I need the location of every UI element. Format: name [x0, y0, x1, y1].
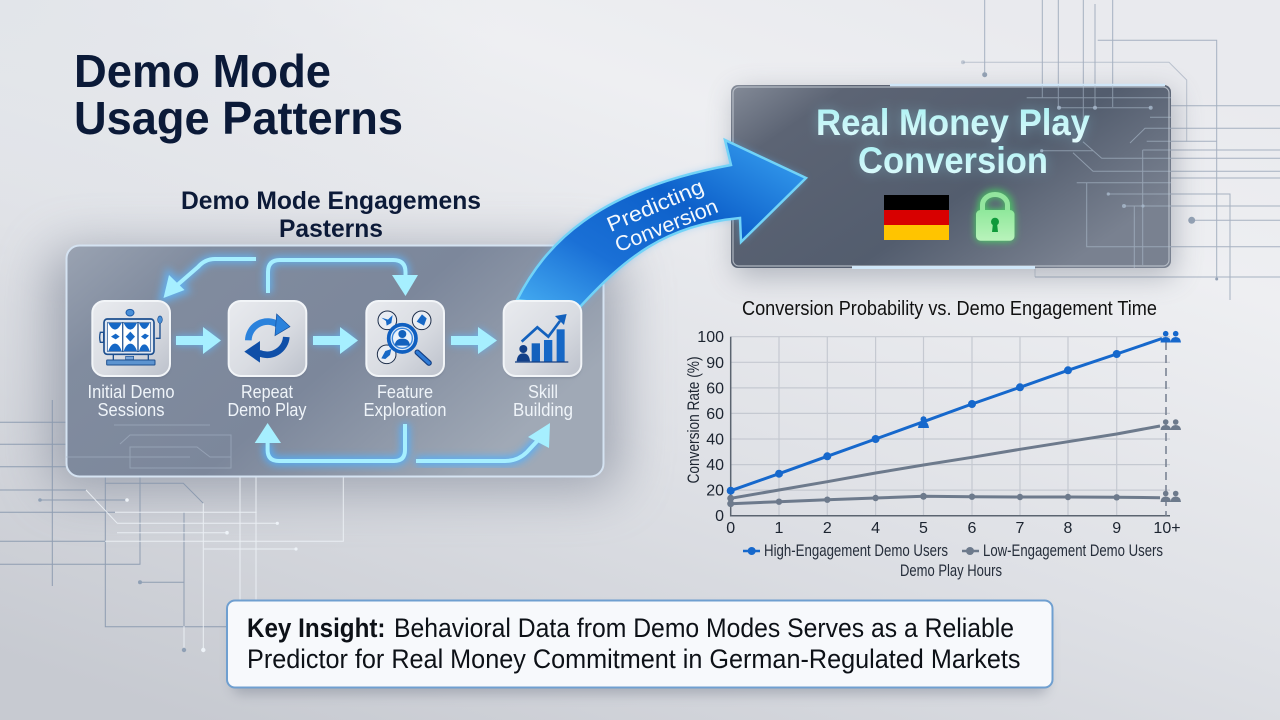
x axis title: Demo Play Hours [900, 562, 1002, 580]
arrow label [604, 175, 721, 257]
y axis labels: 40 [706, 432, 724, 448]
icon: slot machine [92, 301, 170, 378]
step labels: Building [513, 399, 573, 420]
arrow: repeat play to feature exploration [268, 260, 418, 296]
user icons: low engagement lower [1160, 491, 1181, 502]
x axis labels: 5 [919, 520, 928, 537]
icon: feature exploration magnifier [366, 301, 444, 378]
series: low engagement upper line [731, 426, 1160, 498]
title: Usage Patterns [74, 92, 403, 144]
heading: real money play conversion: Conversion [858, 140, 1048, 181]
x axis labels: 7 [1016, 520, 1025, 537]
chart title: Conversion Probability vs. Demo Engagement Time [742, 297, 1157, 320]
legend [743, 542, 1163, 560]
user icons: high engagement [1160, 331, 1181, 342]
y axis labels: 20 [706, 482, 724, 500]
series: low engagement lower line [727, 493, 1160, 507]
panel: engagement patterns [66, 246, 604, 476]
x axis labels: 4 [871, 520, 880, 537]
x axis labels: 1 [775, 520, 784, 537]
callout text: Key Insight: [247, 613, 386, 643]
callout: key insight [227, 600, 1052, 688]
step labels: Demo Play [228, 399, 307, 420]
icon: green lock [976, 194, 1014, 241]
y axis labels [697, 329, 724, 525]
y axis title: Conversion Rate (%) [685, 356, 703, 484]
callout text [247, 613, 1020, 674]
arrow: step 1 to step 2 [176, 327, 221, 354]
x axis labels: 10+ [1153, 520, 1181, 537]
panel heading [181, 187, 481, 243]
arrow: predicting conversion [517, 140, 806, 308]
heading: real money play conversion: Real Money Play [816, 102, 1090, 143]
icon: repeat arrows [229, 301, 306, 378]
step labels: Exploration [364, 399, 446, 420]
panel: real money play conversion [731, 85, 1171, 268]
panel heading: Demo Mode Engagemens [181, 187, 481, 215]
step labels: Repeat [241, 381, 293, 402]
y axis labels: 60 [706, 380, 724, 398]
y axis labels: 60 [706, 406, 724, 423]
line chart: conversion rate [685, 329, 1181, 537]
title [74, 45, 403, 144]
panel heading: Pasterns [279, 215, 383, 243]
arrow: feature exploration back to repeat play [255, 423, 405, 461]
callout text: Predictor for Real Money Commitment in German-Regulated Markets [247, 644, 1020, 674]
user icons: low engagement upper [1160, 419, 1181, 430]
x axis labels [726, 520, 1181, 537]
step labels: Feature [377, 381, 433, 402]
legend: High-Engagement Demo Users [764, 542, 948, 560]
icon: skill building chart [504, 301, 581, 378]
y axis labels: 40 [706, 457, 724, 474]
step labels [88, 381, 573, 420]
step labels: Skill [528, 381, 558, 402]
x axis labels: 9 [1112, 520, 1121, 537]
arrow: step 3 to step 4 [451, 327, 497, 354]
y axis labels: 90 [706, 355, 724, 372]
icon: german flag [884, 195, 949, 240]
step labels: Sessions [98, 399, 164, 420]
callout text: Behavioral Data from Demo Modes Serves as a Reliable [394, 613, 1014, 643]
title: Demo Mode [74, 45, 331, 97]
heading: real money play conversion: Real Money Play [816, 102, 1090, 143]
heading: real money play conversion [816, 102, 1090, 181]
x axis labels: 6 [968, 520, 977, 537]
arrow label: Predicting [604, 175, 707, 237]
arrow label: Conversion [612, 195, 721, 257]
legend: Low-Engagement Demo Users [983, 542, 1163, 560]
series: high engagement line [727, 338, 1162, 495]
step labels: Initial Demo [88, 381, 174, 402]
y axis labels: 100 [697, 329, 724, 346]
x axis labels: 0 [726, 520, 735, 537]
arrow: step 2 to step 3 [313, 327, 358, 354]
arrow: feature exploration to skill building [416, 423, 550, 461]
arrow: loop back to initial demo sessions [164, 259, 256, 298]
y axis labels: 0 [715, 508, 724, 525]
x axis labels: 2 [823, 520, 832, 537]
x axis labels: 8 [1064, 520, 1073, 537]
heading: real money play conversion: Conversion [858, 140, 1048, 181]
